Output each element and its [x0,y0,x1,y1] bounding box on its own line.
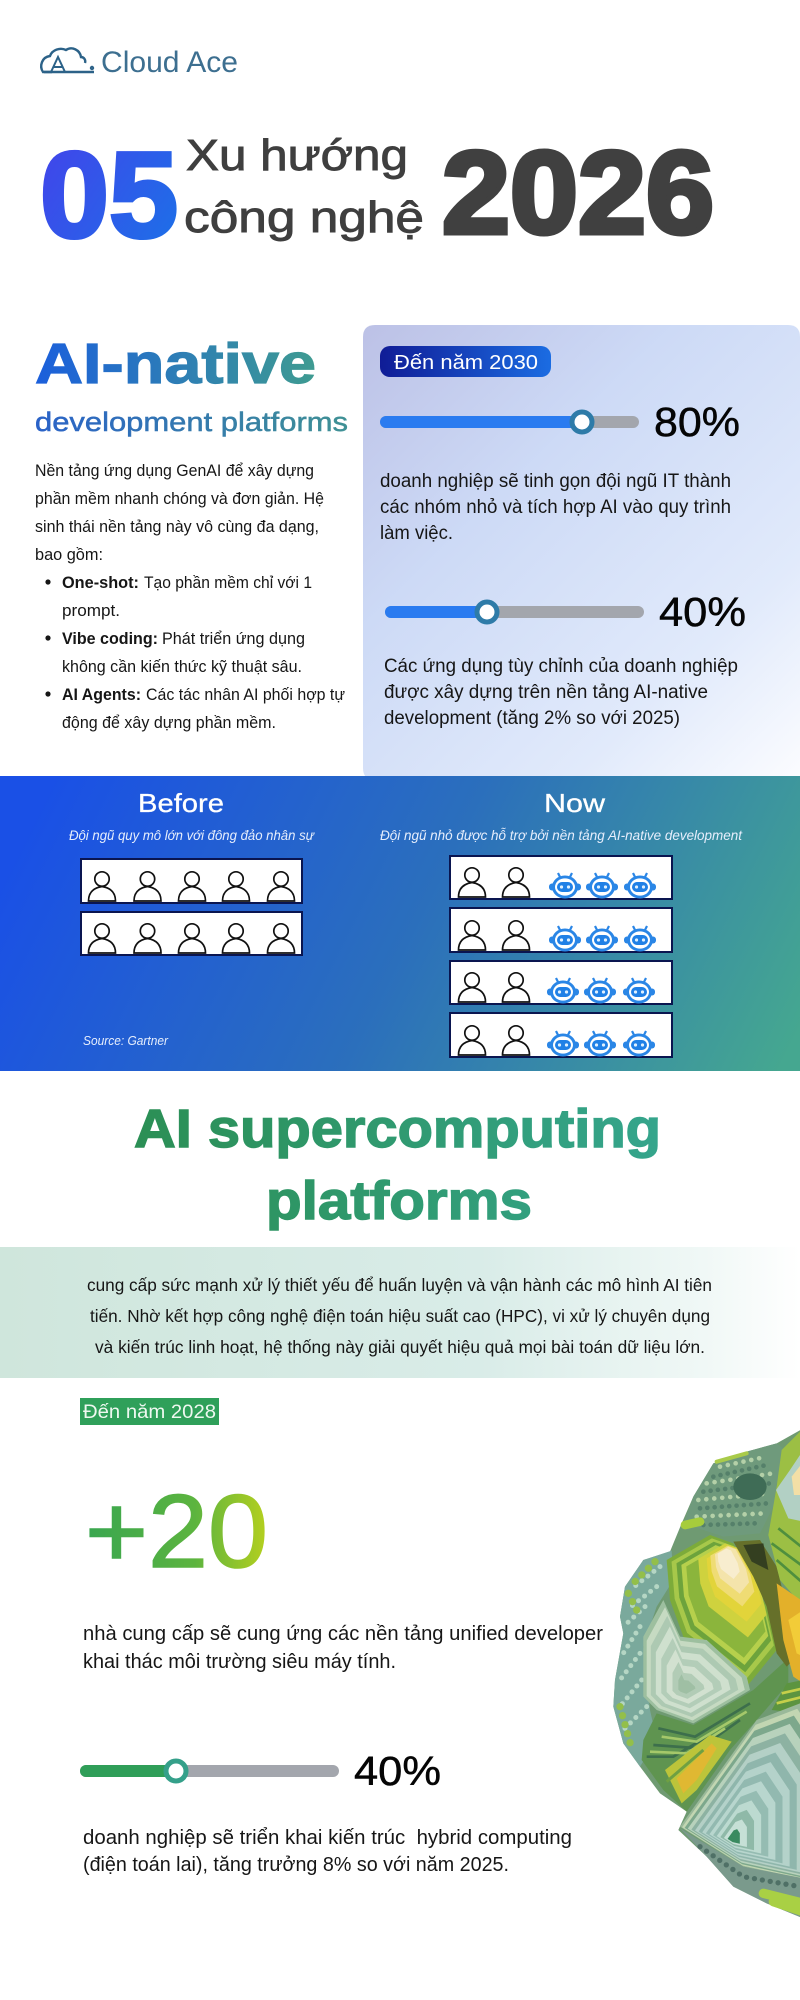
team row: now 4 [450,1013,672,1057]
bullet list: One-shot: [62,574,139,592]
bullet list: Phát triển ứng dụng [162,630,305,648]
facet: pale mint strata [643,1600,750,1723]
big number 05: 05 [40,127,178,263]
panel: Before / Now band [0,776,800,1071]
text: +20 description: nhà cung cấp sẽ cung ứng các nền tảng unified developer [83,1623,603,1645]
heading: AI supercomputing platforms: platforms [266,1171,532,1231]
lower green strata band [642,1658,788,1812]
bullet list: không cần kiến thức kỹ thuật sâu. [62,658,302,676]
icon: cloud logo [41,48,94,72]
intro paragraph: phần mềm nhanh chóng và đơn giản. Hệ [35,490,324,508]
text: hybrid computing description [83,1827,572,1876]
panel: supercomputing description: cung cấp sức mạnh xử lý thiết yếu để huấn luyện và vận hành các mô hình AI tiên [87,1275,712,1295]
panel: supercomputing description [0,1247,800,1378]
intro paragraph: bao gồm: [35,546,103,564]
stat 40% green section: 40% [354,1748,441,1794]
bullet list [45,574,345,732]
caption: Now: Đội ngũ nhỏ được hỗ trợ bởi nền tảng AI-native development [380,827,743,843]
text: 40% description: được xây dựng trên nền tảng AI-native [384,682,708,703]
big year 2026: 2026 [442,127,714,258]
bullet list: Các tác nhân AI phối hợp tự [146,686,345,704]
heading: AI supercomputing platforms [134,1099,661,1231]
heading: Now: Now [544,788,605,818]
bullet list: động để xây dựng phần mềm. [62,714,276,732]
facet: yellow-green strata [667,1535,777,1687]
intro paragraph: Nền tảng ứng dụng GenAI để xây dựng [35,462,314,480]
text: 80% description: các nhóm nhỏ và tích hợp AI vào quy trình [380,497,731,518]
stat +20: +20 [85,1474,268,1590]
stat 80%: 80% [654,399,740,445]
text: hybrid computing description: (điện toán lai), tăng trưởng 8% so với năm 2025. [83,1854,509,1876]
subheading: development platforms: development platforms [35,407,348,437]
panel: supercomputing description: và kiến trúc linh hoạt, hệ thống này giải quyết hiệu quả mọi bài toán dữ liệu lớn. [95,1337,705,1357]
facet: right side strata [768,1428,800,1713]
title line 2: công nghệ [184,193,424,242]
team row: now 2 [450,908,672,952]
panel background [363,325,800,780]
bullet list: Tạo phần mềm chỉ với 1 [144,574,312,592]
dark gap [733,1540,800,1667]
text: +20 description: khai thác môi trường siêu máy tính. [83,1651,396,1673]
intro paragraph [35,462,324,564]
panel: 2030 statistics [363,325,800,780]
facet: large blue-gray strata [680,1703,800,1887]
title [40,127,714,263]
text: 80% description: làm việc. [380,523,453,544]
team row: before 1 [81,859,302,903]
text: 40% description [384,656,738,729]
panel: AI-native intro text [35,332,348,732]
heading: Before: Before [138,788,224,818]
progress bar 80% [380,412,639,432]
bullet list: Vibe coding: [62,630,158,648]
text: +20 description [83,1623,603,1673]
progress bar 40% green [80,1761,339,1781]
text: 80% description [380,471,731,544]
heading: AI supercomputing platforms: AI supercomputing [134,1099,661,1159]
moss cluster top [683,1443,793,1537]
text: hybrid computing description: doanh nghiệp sẽ triển khai kiến trúc hybrid computing [83,1827,572,1849]
team row: now 1 [450,856,672,899]
team row: before 2 [81,912,302,955]
title line 1: Xu hướng [186,131,408,180]
bullet list: AI Agents: [62,686,141,704]
caption: Before: Đội ngũ quy mô lớn với đông đảo nhân sự [69,827,315,843]
stat 40%: 40% [659,589,746,635]
logo wordmark: Cloud Ace [101,46,238,79]
intro paragraph: sinh thái nền tảng này vô cùng đa dạng, [35,518,319,536]
moss rim left [613,1551,673,1767]
team row: now 3 [450,961,672,1004]
rock base [613,1428,800,1918]
text: 40% description: development (tăng 2% so với 2025) [384,708,680,729]
heading: AI-native: AI-native [35,332,316,396]
badge: Đến năm 2030: Đến năm 2030 [394,351,538,374]
badge: Đến năm 2028: Đến năm 2028 [83,1401,216,1423]
panel: supercomputing description: tiến. Nhờ kết hợp công nghệ điện toán hiệu suất cao (HPC), vi xử lý chuyên dụng [90,1306,710,1326]
badge: Đến năm 2030 [380,346,551,377]
progress bar 40% [385,602,644,622]
band background [0,776,800,1071]
text: 80% description: doanh nghiệp sẽ tinh gọn đội ngũ IT thành [380,471,731,492]
logo: Cloud Ace [41,46,238,79]
bullet list: prompt. [62,602,120,620]
source note: Source: Gartner [83,1033,169,1048]
moss rim bottom [680,1828,800,1918]
illustration: layered mineral sphere [613,1428,800,1918]
text: 40% description: Các ứng dụng tùy chỉnh của doanh nghiệp [384,656,738,677]
